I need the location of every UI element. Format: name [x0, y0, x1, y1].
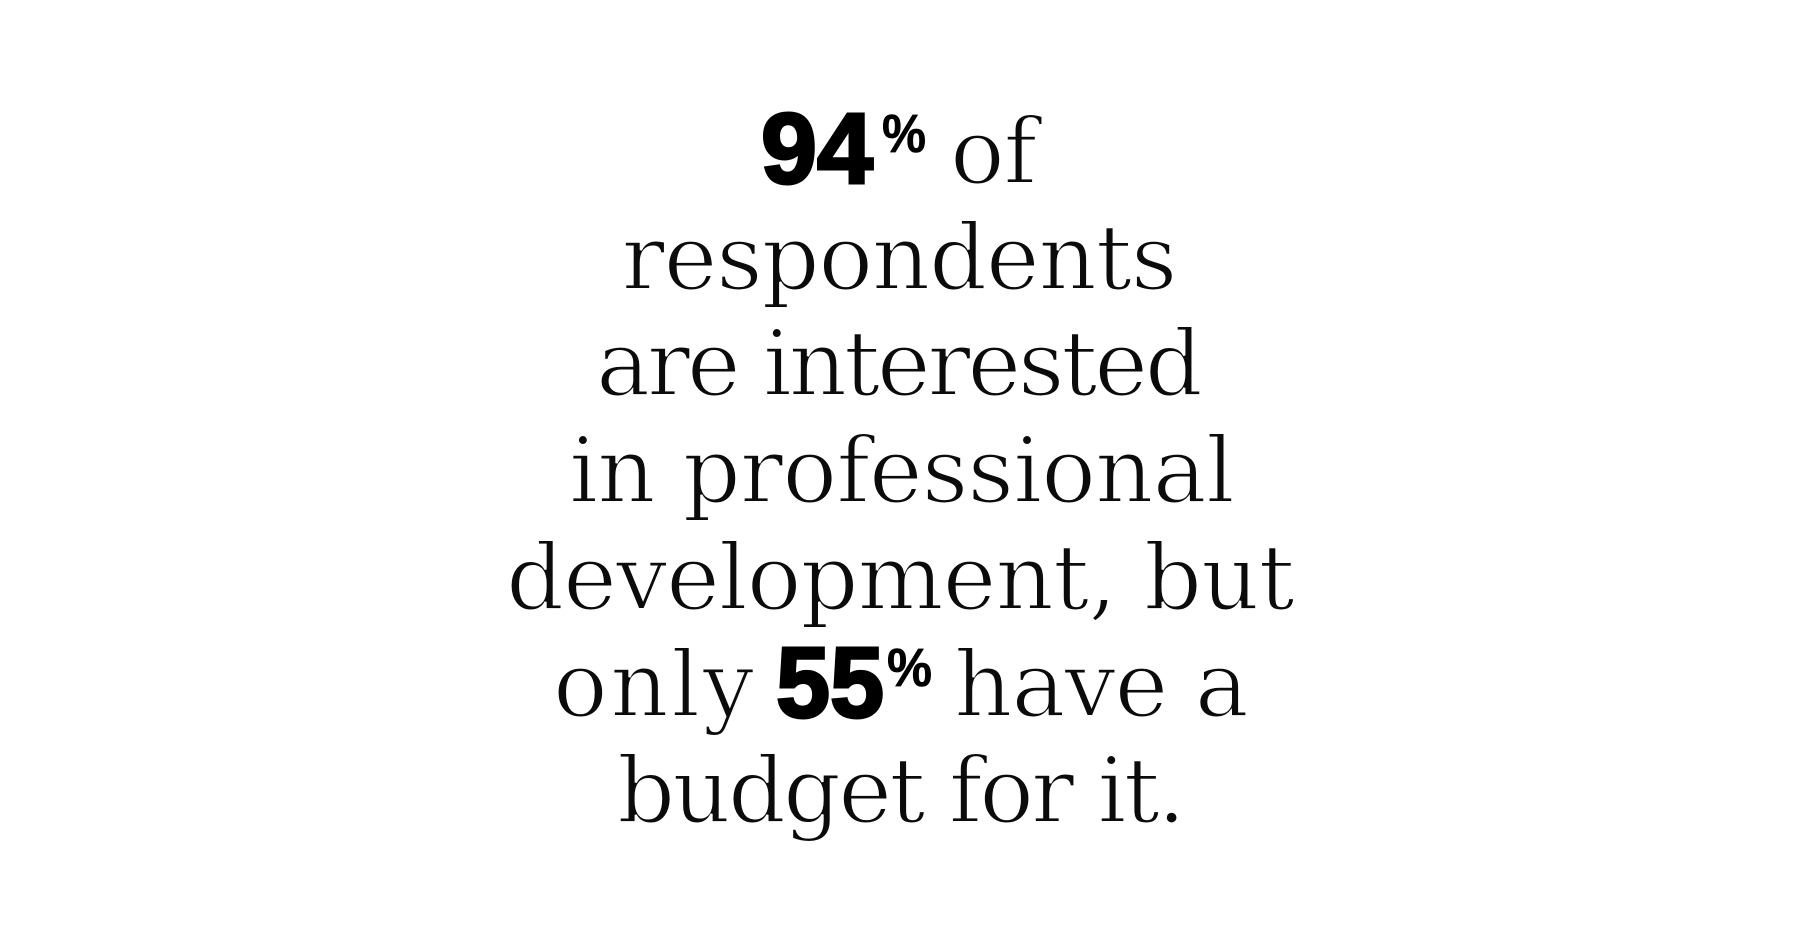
line 5: development, but — [506, 526, 1295, 631]
line 1: 94% of: of — [950, 100, 1043, 205]
stat: 55 percent: 55 — [776, 627, 884, 739]
line 4: in professional — [569, 419, 1235, 524]
line 7: budget for it. — [617, 739, 1186, 844]
line 2: respondents — [622, 206, 1178, 311]
stat: 94 percent — [761, 93, 926, 205]
line 6: only 55% have a: have a — [954, 633, 1249, 738]
line 1: 94% of — [761, 93, 1043, 205]
line 3: are interested — [596, 312, 1203, 417]
stat: 55 percent: % — [887, 638, 932, 698]
stat: 94 percent: 94 — [761, 93, 873, 205]
line 6: only 55% have a: only — [553, 633, 755, 738]
line 6: only 55% have a — [553, 627, 1249, 739]
stat: 94 percent: % — [882, 104, 926, 164]
statement text block — [506, 93, 1295, 844]
